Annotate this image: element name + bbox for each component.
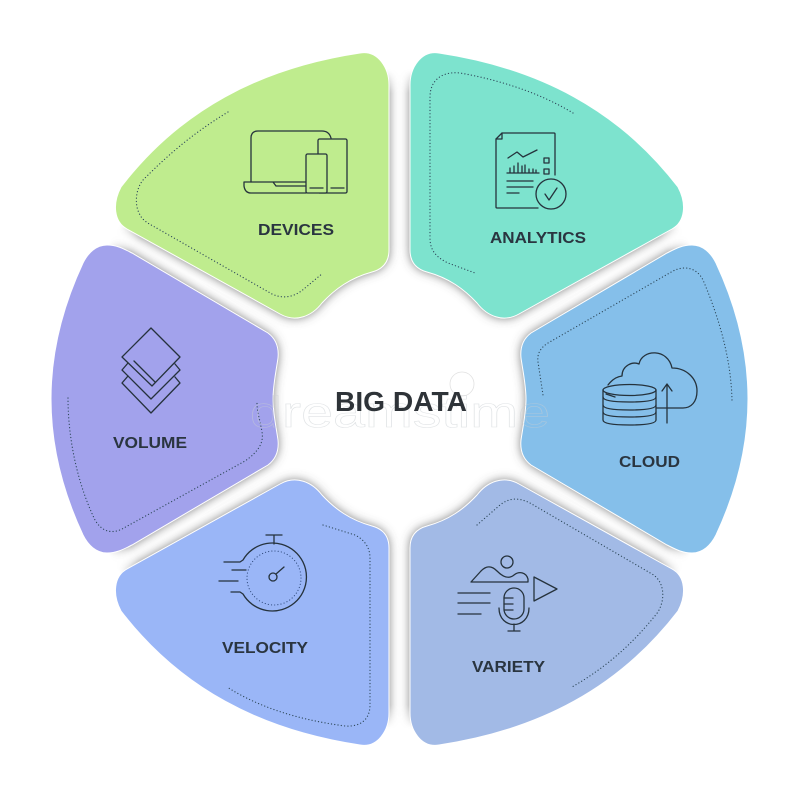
- label: analytics: ANALYTICS: [490, 230, 586, 247]
- label: velocity: VELOCITY: [222, 640, 308, 657]
- label: devices: DEVICES: [258, 222, 334, 239]
- icon: image, audio and video media: [458, 556, 557, 631]
- label: cloud: CLOUD: [619, 454, 680, 471]
- title: BIG DATA: [335, 386, 467, 417]
- panel: variety: [410, 480, 684, 745]
- icon: laptop, tablet and phone: [244, 131, 347, 193]
- icon: stacked layers: [122, 328, 180, 413]
- icon: stopwatch: [219, 535, 306, 611]
- panel: velocity: [115, 480, 389, 745]
- panel: analytics: [410, 53, 684, 318]
- panel: volume: [51, 245, 278, 553]
- inner panel shadows: [112, 73, 686, 724]
- watermark: dreamstime: [250, 388, 550, 437]
- panel: cloud: [521, 245, 748, 553]
- watermark: [250, 372, 550, 437]
- panel: devices: [115, 53, 389, 318]
- icon: cloud database upload: [603, 353, 697, 425]
- label: volume: VOLUME: [113, 435, 187, 452]
- label: variety: VARIETY: [472, 659, 545, 676]
- icon: report with check mark: [496, 133, 566, 209]
